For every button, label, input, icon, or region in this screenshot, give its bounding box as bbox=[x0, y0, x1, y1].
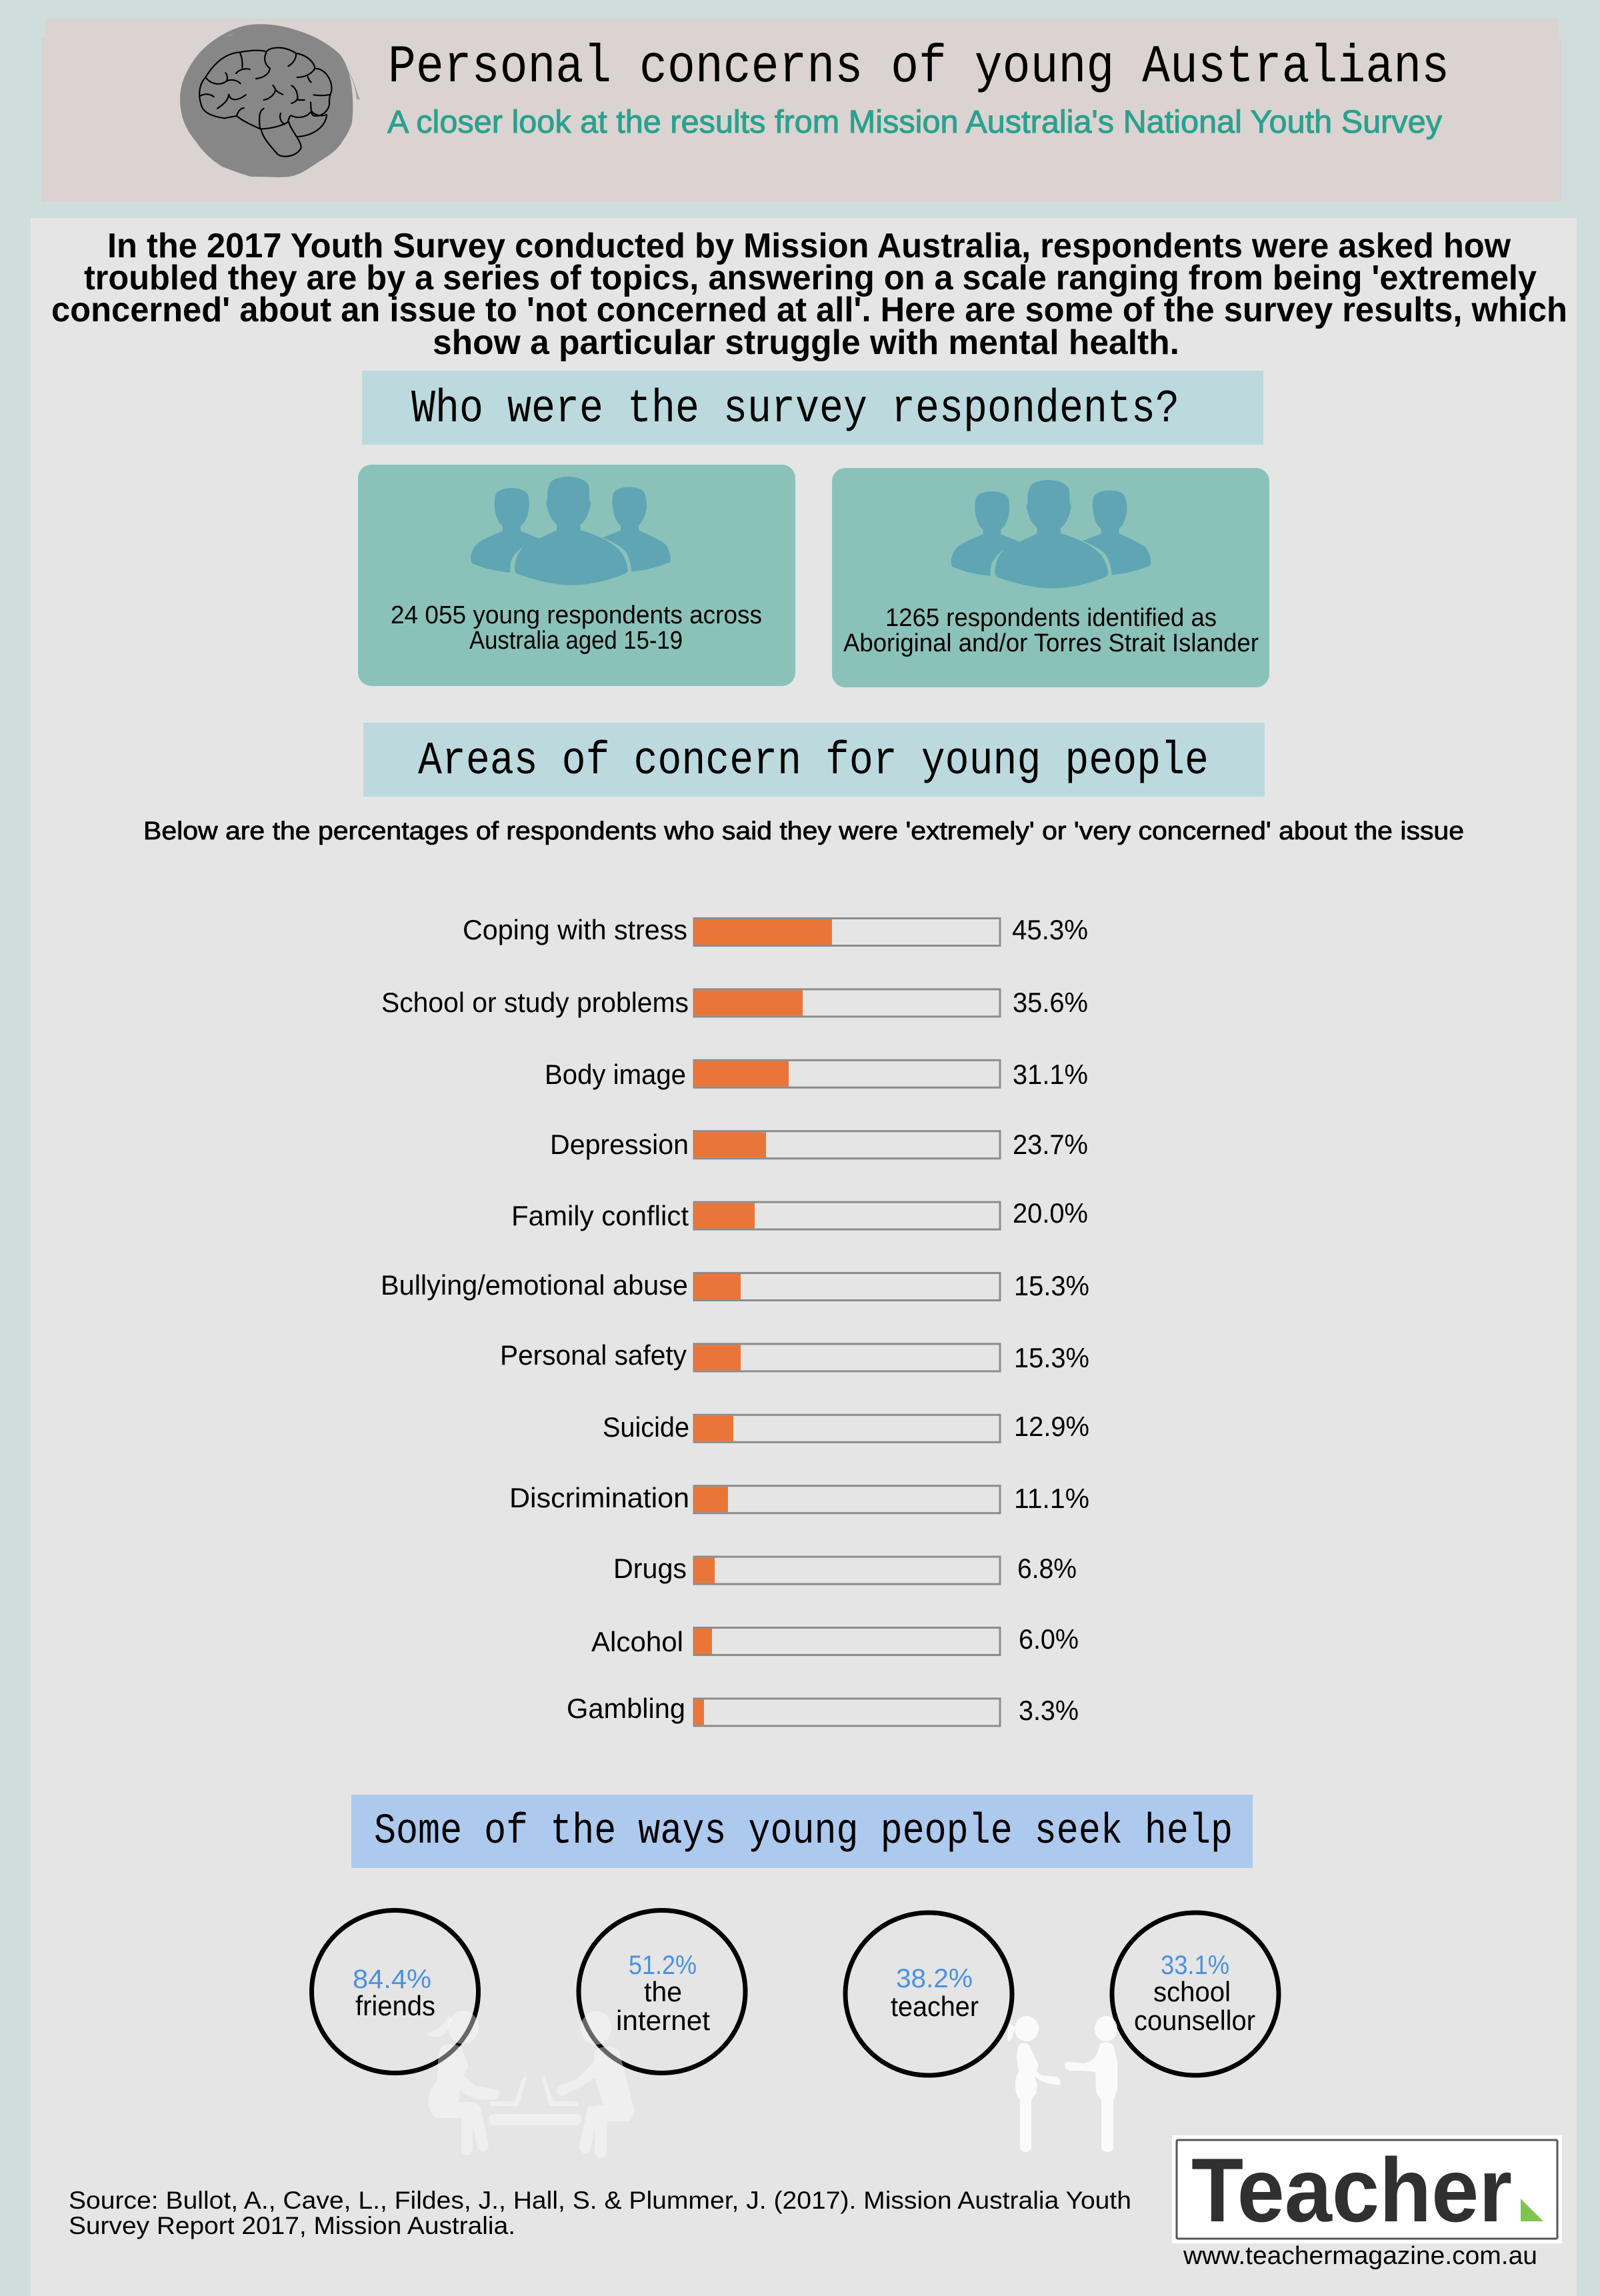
bar: bullying/emotional abuse: Bullying/emotional abuse bbox=[381, 1269, 688, 1301]
bar: family conflict bbox=[511, 1197, 1088, 1231]
circle: school counsellor: school bbox=[1153, 1976, 1231, 2007]
panel: respondents card 1 bbox=[358, 465, 795, 686]
source citation: Survey Report 2017, Mission Australia. bbox=[69, 2212, 515, 2239]
panel: respondents card 2 bbox=[832, 468, 1269, 687]
bar: personal safety bbox=[500, 1339, 1089, 1373]
intro text block: In the 2017 Youth Survey conducted by Mission Australia, respondents were asked how bbox=[107, 227, 1511, 265]
circle: school counsellor bbox=[1112, 1913, 1279, 2075]
website url: www.teachermagazine.com.au bbox=[1183, 2242, 1537, 2270]
bar: suicide bbox=[603, 1411, 1089, 1443]
text: 24 055 young respondents across bbox=[391, 601, 762, 629]
bar: depression bbox=[550, 1129, 1088, 1160]
circle: friends: friends bbox=[355, 1990, 435, 2021]
icon: brain bbox=[180, 24, 360, 177]
bar: personal safety: 15.3% bbox=[1014, 1342, 1089, 1373]
bar: coping with stress: 45.3% bbox=[1012, 914, 1088, 945]
bar: body image: 31.1% bbox=[1013, 1059, 1088, 1090]
source citation bbox=[69, 2187, 1131, 2239]
bar: body image: Body image bbox=[545, 1059, 686, 1090]
source citation: Source: Bullot, A., Cave, L., Fildes, J., Hall, S. & Plummer, J. (2017). Mission Australia Youth bbox=[69, 2187, 1131, 2214]
intro text block: concerned' about an issue to 'not concerned at all'. Here are some of the survey results, which bbox=[51, 291, 1567, 329]
bar chart: areas of concern bbox=[381, 914, 1089, 1726]
circle: teacher bbox=[845, 1913, 1012, 2075]
bar: discrimination: Discrimination bbox=[509, 1482, 689, 1513]
circle: friends: 84.4% bbox=[353, 1965, 431, 1994]
bar: school or study problems: 35.6% bbox=[1013, 987, 1088, 1018]
circle: the internet bbox=[579, 1911, 745, 2073]
bar: drugs: Drugs bbox=[613, 1553, 687, 1584]
bar: gambling: Gambling bbox=[567, 1693, 685, 1724]
bar: gambling bbox=[567, 1693, 1079, 1726]
bar: family conflict: Family conflict bbox=[511, 1200, 689, 1231]
bar: suicide: Suicide bbox=[603, 1411, 689, 1443]
icon: two people standing bbox=[1007, 2016, 1117, 2152]
bar: depression: 23.7% bbox=[1013, 1129, 1088, 1160]
heading: areas of concern: Areas of concern for young people bbox=[418, 735, 1209, 788]
panel: respondents card 2: Aboriginal and/or Torres Strait Islander bbox=[843, 629, 1259, 657]
bar: bullying/emotional abuse: 15.3% bbox=[1014, 1270, 1089, 1301]
bar: discrimination bbox=[509, 1482, 1089, 1514]
circle: friends bbox=[312, 1911, 479, 2073]
bar: coping with stress bbox=[463, 914, 1088, 945]
intro text block bbox=[51, 227, 1567, 362]
heading: who were the survey respondents bbox=[362, 371, 1263, 445]
intro text block: troubled they are by a series of topics, answering on a scale ranging from being 'extremely bbox=[84, 259, 1537, 297]
intro text block: show a particular struggle with mental health. bbox=[433, 323, 1179, 362]
bar: school or study problems bbox=[381, 987, 1088, 1018]
bar: drugs bbox=[613, 1553, 1077, 1584]
panel: header bbox=[41, 19, 1561, 202]
icon: group of people bbox=[471, 477, 671, 585]
heading: areas of concern bbox=[363, 723, 1265, 797]
bar: depression: Depression bbox=[550, 1129, 689, 1160]
bar: discrimination: 11.1% bbox=[1014, 1483, 1089, 1514]
bar: coping with stress: Coping with stress bbox=[463, 914, 687, 945]
heading: ways young people seek help: Some of the ways young people seek help bbox=[374, 1808, 1233, 1856]
icon: two people seated with laptops bbox=[427, 2011, 635, 2158]
bar: family conflict: 20.0% bbox=[1013, 1197, 1088, 1229]
heading: who were the survey respondents: Who were the survey respondents? bbox=[411, 383, 1179, 436]
bar: alcohol: Alcohol bbox=[591, 1626, 683, 1657]
bar: gambling: 3.3% bbox=[1019, 1695, 1079, 1726]
circle: teacher: teacher bbox=[891, 1991, 979, 2022]
circle: the internet: 51.2% bbox=[629, 1951, 697, 1980]
bar: bullying/emotional abuse bbox=[381, 1269, 1089, 1301]
title: Personal concerns of young Australians bbox=[388, 37, 1449, 98]
subtitle: A closer look at the results from Mission Australia's National Youth Survey bbox=[387, 105, 1442, 140]
logo: Teacher: Teacher bbox=[1191, 2139, 1512, 2241]
text: 1265 respondents identified as bbox=[885, 604, 1217, 632]
icon: group of people bbox=[951, 480, 1151, 589]
bar: drugs: 6.8% bbox=[1017, 1553, 1077, 1584]
bar: suicide: 12.9% bbox=[1014, 1411, 1089, 1442]
bar: school or study problems: School or study problems bbox=[381, 987, 689, 1018]
circle: the internet: internet bbox=[616, 2005, 710, 2036]
bar: alcohol bbox=[591, 1623, 1079, 1657]
bar: personal safety: Personal safety bbox=[500, 1339, 687, 1371]
bar: alcohol: 6.0% bbox=[1019, 1623, 1079, 1655]
circle: school counsellor: counsellor bbox=[1134, 2005, 1255, 2036]
bar: body image bbox=[545, 1059, 1088, 1090]
circle: the internet: the bbox=[644, 1976, 682, 2007]
heading: ways young people seek help bbox=[351, 1795, 1253, 1868]
panel: respondents card 1: Australia aged 15-19 bbox=[469, 627, 683, 655]
circle: teacher: 38.2% bbox=[896, 1964, 973, 1993]
circle: school counsellor: 33.1% bbox=[1161, 1951, 1229, 1980]
chart caption: Below are the percentages of respondents who said they were 'extremely' or 'very concerned' about the issue bbox=[143, 817, 1464, 845]
